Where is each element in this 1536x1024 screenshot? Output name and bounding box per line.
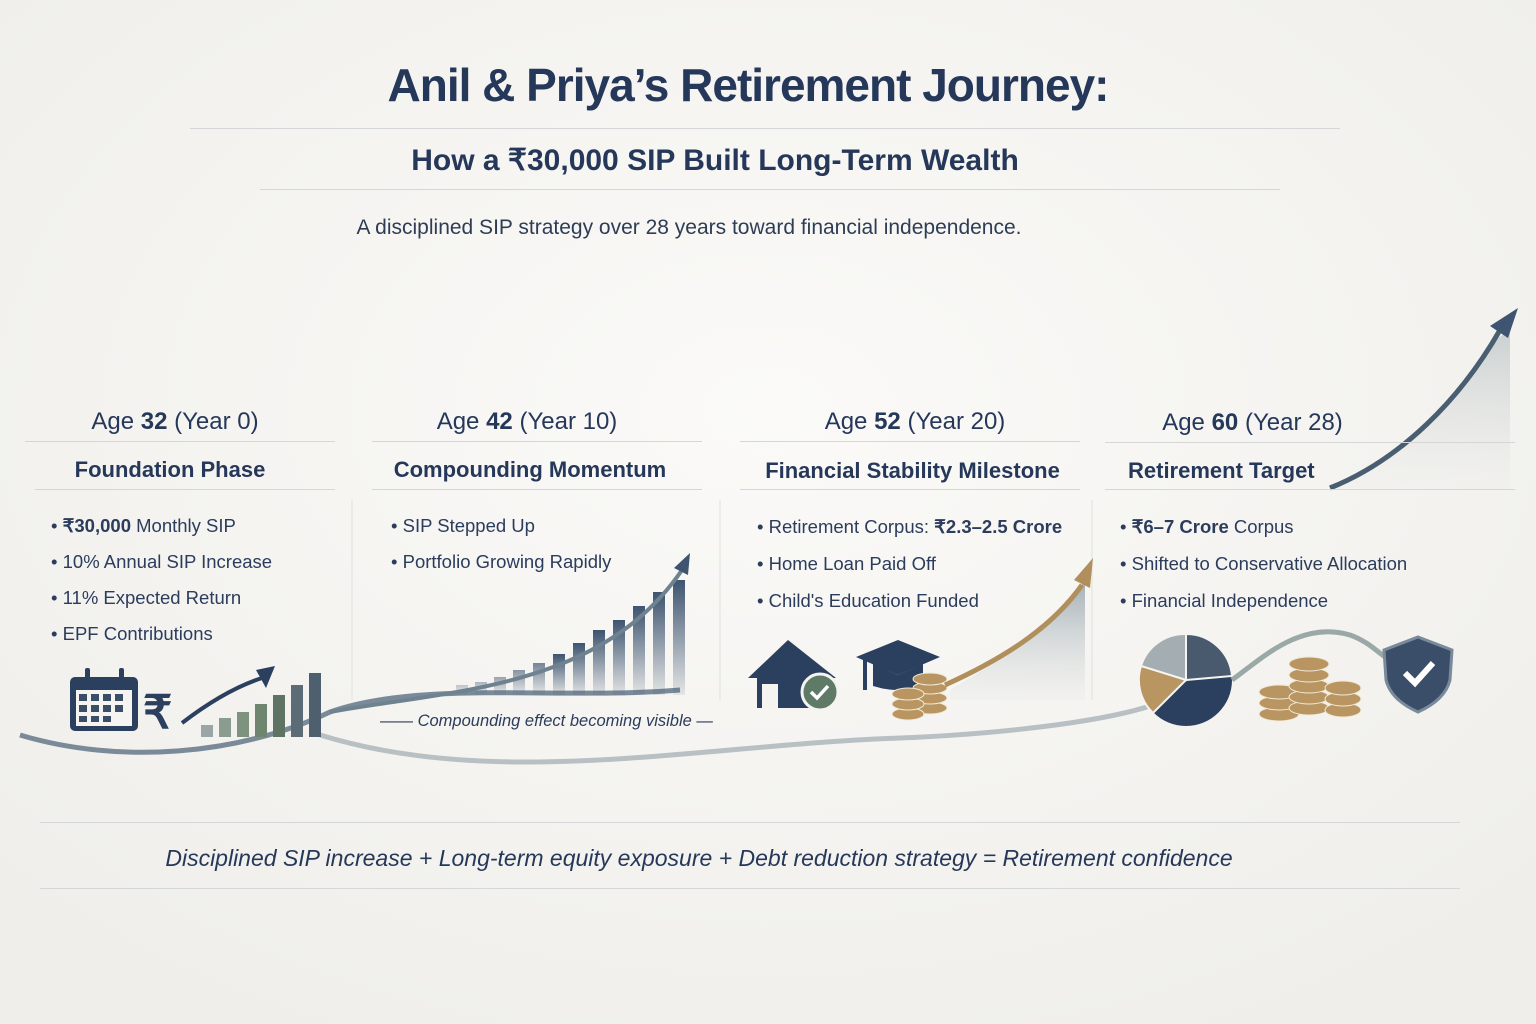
phase: stability: Financial Stability Milestone — [765, 458, 1060, 483]
icon: pie chart — [1139, 634, 1232, 726]
phase: foundation: Foundation Phase — [75, 457, 265, 482]
bullets: • Financial Independence — [1120, 590, 1328, 611]
bullets — [391, 515, 612, 572]
bullets — [757, 516, 1062, 611]
subtitle: How a ₹30,000 SIP Built Long-Term Wealth — [411, 144, 1019, 177]
bullets: • 11% Expected Return — [51, 587, 241, 608]
tagline: A disciplined SIP strategy over 28 years toward financial independence. — [356, 216, 1022, 239]
phase: retirement: Retirement Target — [1128, 458, 1315, 483]
heading: age 60: Age 60 (Year 28) — [1162, 409, 1343, 436]
bullets — [51, 515, 272, 644]
bullets: • 10% Annual SIP Increase — [51, 551, 272, 572]
icon: shield — [1384, 637, 1452, 712]
icon: graduation cap and coins — [856, 640, 947, 720]
bullets — [1120, 516, 1407, 611]
bullets: • Shifted to Conservative Allocation — [1120, 553, 1407, 574]
arrow: big growth — [1330, 308, 1518, 490]
wave path — [20, 690, 1150, 762]
chart: compounding bars — [330, 553, 690, 712]
bullets: • Child's Education Funded — [757, 590, 979, 611]
caption: compounding: —— Compounding effect becoming visible — — [380, 712, 713, 730]
icon: calendar — [70, 668, 172, 738]
chart: area with gold arrow — [945, 558, 1093, 700]
heading: age 32: Age 32 (Year 0) — [91, 408, 259, 435]
phase: compounding: Compounding Momentum — [394, 457, 666, 482]
icon: house — [748, 640, 838, 710]
bullets: • Home Loan Paid Off — [757, 553, 936, 574]
bullets: • ₹6–7 Crore Corpus — [1120, 516, 1294, 537]
formula footer: Disciplined SIP increase + Long-term equity exposure + Debt reduction strategy = Retirement confidence — [165, 845, 1233, 871]
bullets: • SIP Stepped Up — [391, 515, 535, 536]
bullets: • Portfolio Growing Rapidly — [391, 551, 611, 572]
panel: age 32 — [25, 408, 335, 644]
heading: age 42: Age 42 (Year 10) — [437, 408, 617, 435]
panel: age 60 — [1105, 409, 1515, 611]
panel: age 42 — [372, 408, 702, 572]
bullets: • EPF Contributions — [51, 623, 213, 644]
icon: calendar: ₹ — [143, 686, 172, 738]
heading: age 52: Age 52 (Year 20) — [825, 408, 1005, 435]
panel: age 52 — [740, 408, 1080, 611]
bullets: • Retirement Corpus: ₹2.3–2.5 Crore — [757, 516, 1062, 537]
chart: small bars — [182, 666, 321, 737]
title: Anil & Priya’s Retirement Journey: — [388, 59, 1108, 111]
bullets: • ₹30,000 Monthly SIP — [51, 515, 236, 536]
icon: coins — [1259, 657, 1361, 721]
